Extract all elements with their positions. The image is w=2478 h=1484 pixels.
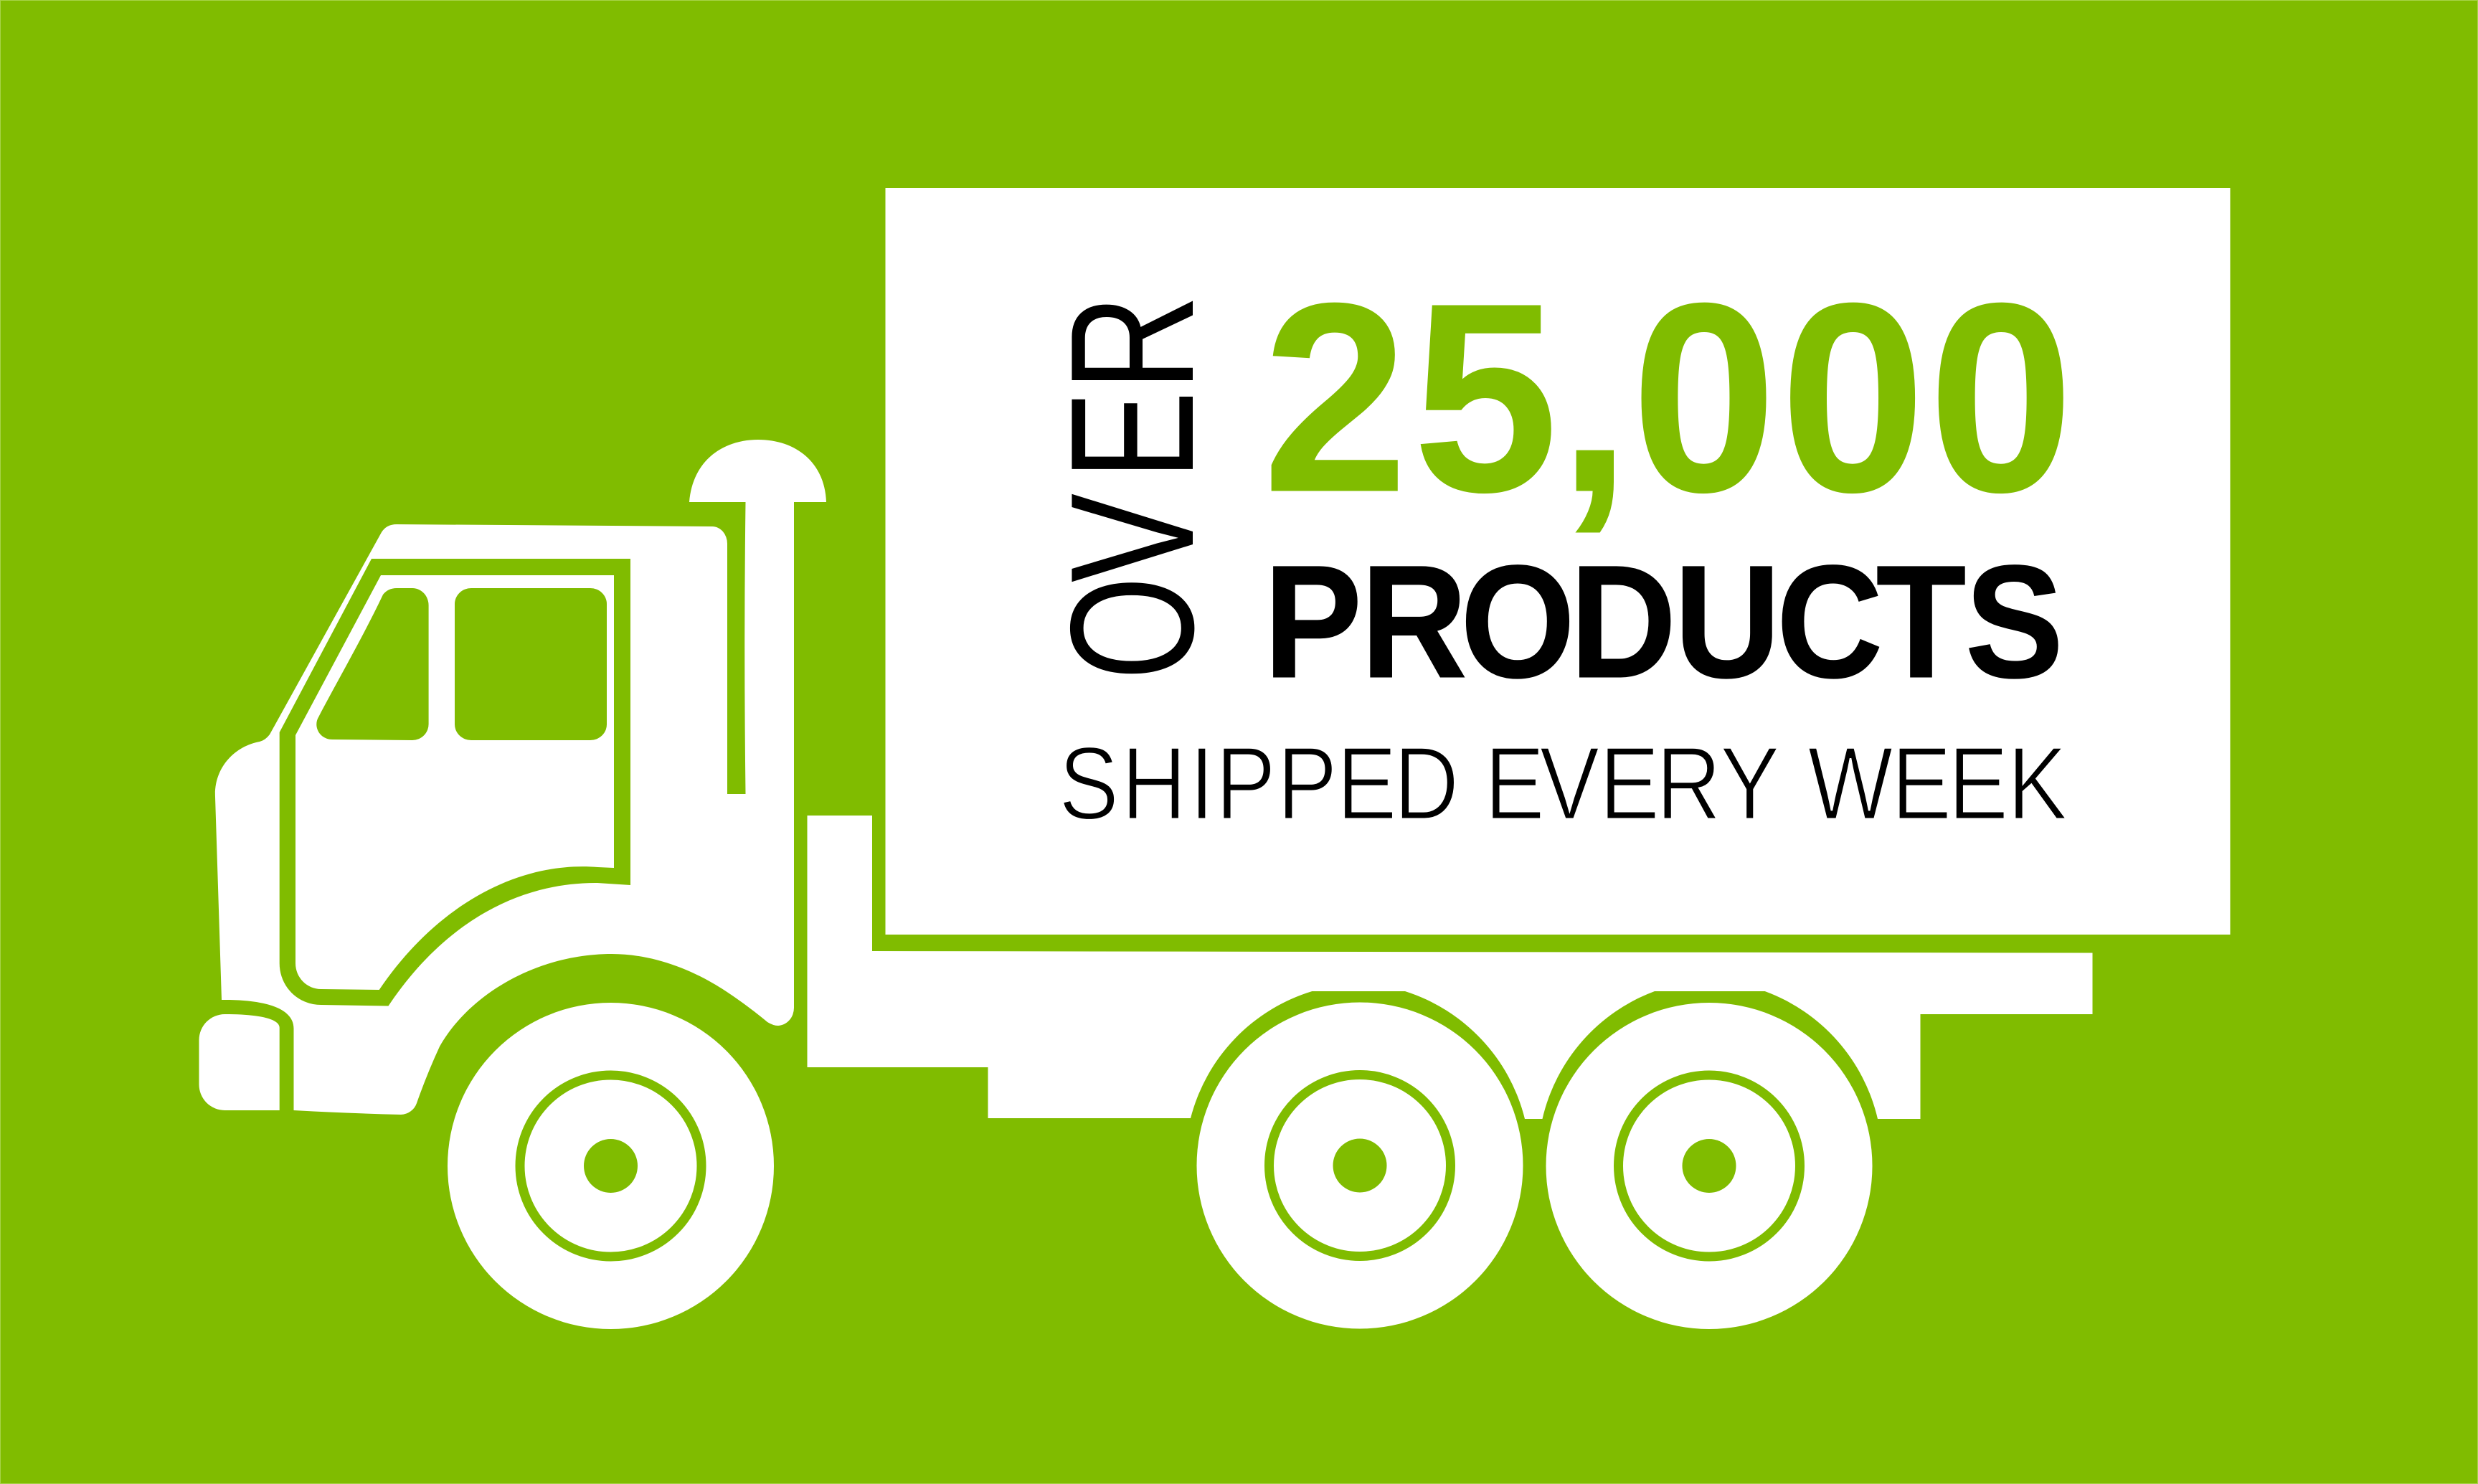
text: SHIPPED EVERY WEEK: SHIPPED EVERY WEEK [1059, 725, 2068, 841]
front wheel [448, 1003, 774, 1329]
rear window [455, 588, 607, 740]
middle wheel [1196, 1003, 1523, 1328]
door outline [280, 559, 630, 1006]
rear wheel [1546, 1003, 1872, 1329]
text: 25,000: 25,000 [1263, 248, 2073, 548]
chassis [808, 816, 2093, 1119]
cab body with exhaust stack [215, 440, 826, 1115]
truck [199, 188, 2231, 1329]
text: PRODUCTS: PRODUCTS [1264, 531, 2063, 712]
cargo box [885, 188, 2231, 935]
side window [316, 588, 429, 740]
text: OVER: OVER [1034, 295, 1231, 680]
door panel [295, 575, 614, 990]
bumper [199, 1014, 280, 1110]
